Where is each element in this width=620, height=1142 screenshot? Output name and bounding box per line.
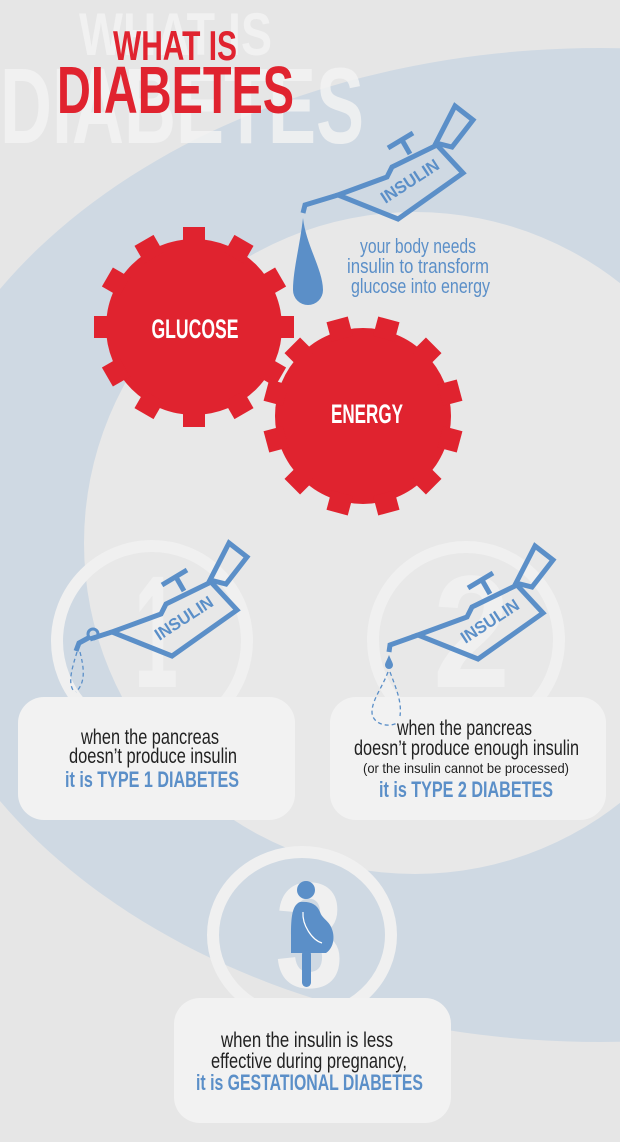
title xyxy=(57,22,294,128)
gear: glucose: GLUCOSE xyxy=(152,314,238,344)
box: gestational text xyxy=(174,998,451,1123)
icon: syringe type 2: INSULIN xyxy=(457,595,523,647)
icon: syringe type 1 xyxy=(90,543,247,656)
ring with number 3: 3 xyxy=(275,851,344,1019)
text: body needs insulin: glucose into energy xyxy=(351,276,490,298)
gear: energy xyxy=(241,294,485,538)
icon: syringe type 1: INSULIN xyxy=(151,592,217,644)
title: DIABETES xyxy=(57,53,294,128)
icon: drip xyxy=(372,655,400,725)
box: type 2 text: it is TYPE 2 DIABETES xyxy=(379,777,553,802)
icon: capped needle xyxy=(71,629,98,692)
box: type 2 text: when the pancreas xyxy=(396,717,532,740)
icon: insulin syringe top: INSULIN xyxy=(377,155,443,207)
box: type 1 text: it is TYPE 1 DIABETES xyxy=(65,767,239,792)
ring with number 2: 2 xyxy=(433,542,510,721)
icon: syringe type 2 xyxy=(389,546,553,659)
ring with number 2 xyxy=(373,542,559,733)
text: body needs insulin xyxy=(347,236,490,298)
box: gestational text: it is GESTATIONAL DIABETES xyxy=(196,1070,423,1095)
title: WHAT IS xyxy=(113,22,237,69)
box: type 2 text: (or the insulin cannot be processed) xyxy=(363,760,569,776)
icon: insulin syringe top xyxy=(303,106,473,219)
ring with number 1: 1 xyxy=(134,542,178,721)
box: gestational text: effective during pregnancy, xyxy=(211,1050,407,1073)
box: gestational text: when the insulin is less xyxy=(220,1029,393,1052)
text: body needs insulin: insulin to transform xyxy=(347,256,489,278)
gear: energy: ENERGY xyxy=(331,399,403,429)
ring with number 3 xyxy=(213,851,391,1019)
panel: type 2 xyxy=(330,542,606,820)
panel: gestational xyxy=(174,851,451,1123)
icon: pregnant woman xyxy=(291,881,333,987)
ghost title: DIABETES xyxy=(0,45,364,166)
box: type 1 text: doesn’t produce insulin xyxy=(69,745,237,768)
text: body needs insulin: your body needs xyxy=(360,236,476,258)
box: type 2 text xyxy=(330,697,606,820)
gear: glucose xyxy=(94,227,294,427)
panel: type 1 xyxy=(18,542,295,820)
ghost title xyxy=(0,1,364,166)
box: type 1 text xyxy=(18,697,295,820)
icon: insulin drop xyxy=(293,218,323,305)
box: type 1 text: when the pancreas xyxy=(80,726,219,749)
ghost title: WHAT IS xyxy=(79,1,272,68)
ring with number 1 xyxy=(57,542,247,736)
